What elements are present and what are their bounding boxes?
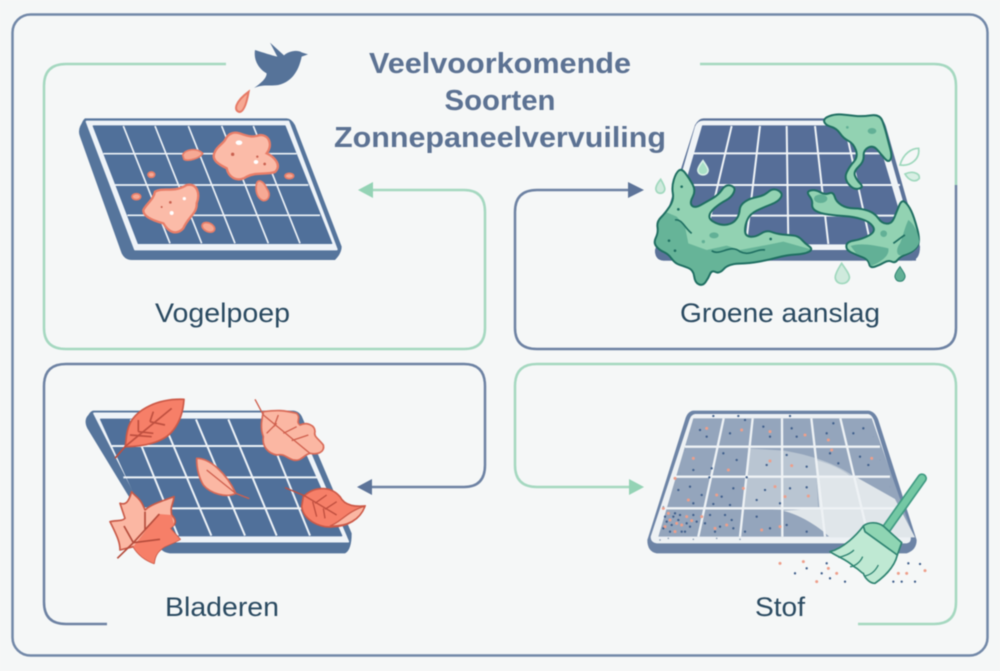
icon: small drop on panel [698,161,708,175]
label: Groene aanslag: Groene aanslag [680,298,880,328]
icon: dark drop [895,267,905,281]
icon: algae panel [650,114,920,290]
icon: drop [236,92,249,112]
icon: leaves panel [86,399,365,563]
solar panel [86,411,352,553]
arrow: to stof [629,479,644,495]
dust specks [663,416,920,582]
title [334,48,666,154]
title: Veelvoorkomende [369,48,631,80]
icon: bird [254,43,308,88]
splat: large [214,133,278,179]
icon: bird dropping panel [79,43,342,260]
label: Stof: Stof [755,592,806,622]
splat: lower [143,185,198,232]
splat: small spots [132,150,294,234]
title: Soorten [444,85,556,117]
leaf: center [197,458,249,499]
solar panel [79,118,342,260]
algae: left mass [650,170,813,290]
leaf: maple [110,492,180,563]
panel: bladeren connector [44,364,485,624]
label: Bladeren: Bladeren [165,592,279,622]
algae: right mass [808,190,919,267]
swept area [743,448,857,510]
panel: groene aanslag connector [515,64,956,349]
panel: stof connector [515,364,956,624]
leaf: right [285,488,365,527]
arrow: to vogelpoep [358,182,373,198]
panel: vogelpoep connector [44,64,485,349]
icon: water drops [656,148,919,284]
arrow: to groene aanslag [628,182,644,198]
icon: dust panel [647,411,925,583]
arrow: to bladeren [357,479,372,495]
title: Zonnepaneelvervuiling [334,122,666,154]
leaf: oak top right [255,399,324,460]
leaf: top left [115,399,184,458]
label: Vogelpoep: Vogelpoep [155,298,290,328]
solar panel [647,411,925,582]
solar panel [655,118,920,261]
icon: broom [830,478,922,583]
algae: top right [824,114,891,189]
